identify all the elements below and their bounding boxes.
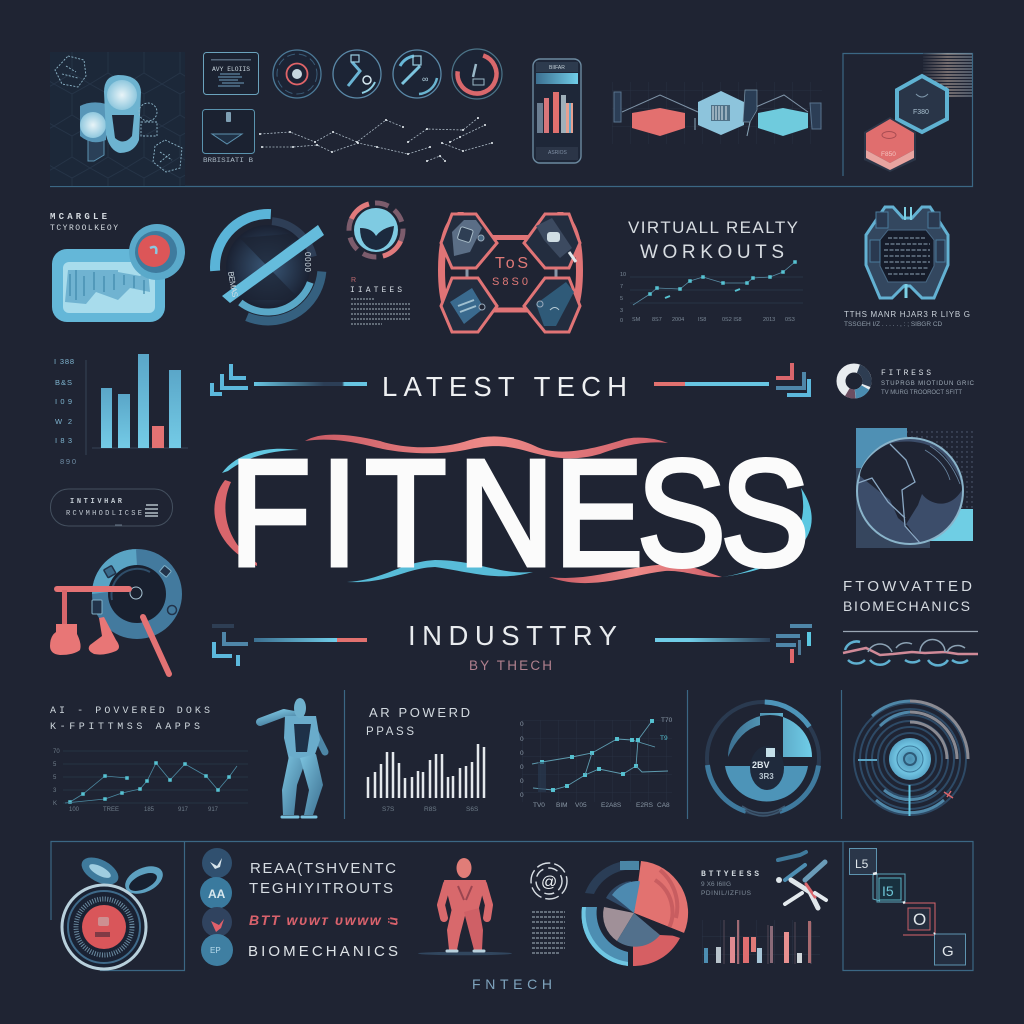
barcode tower bbox=[743, 90, 757, 122]
text: realtime techniques list: REAA(TSHVENTC bbox=[250, 860, 396, 877]
chart: three line chart: V05 bbox=[575, 802, 587, 809]
panel: smartwatches bbox=[50, 52, 185, 186]
text: features note bbox=[350, 277, 411, 324]
icon: earbuds and ring bbox=[62, 852, 167, 969]
connecting lines bbox=[622, 95, 808, 112]
card: funnel: BRBISIATI B bbox=[203, 157, 253, 164]
chart: AI line: 3 bbox=[53, 788, 57, 794]
chart: AI line: K bbox=[53, 801, 57, 807]
heading: biomechanics right: BIOMECHANICS bbox=[843, 598, 970, 614]
chart: VR line: SM bbox=[632, 317, 641, 323]
chart: pie bbox=[581, 860, 688, 966]
icon: shield processor bbox=[866, 207, 948, 298]
heading: AI powered: K-FPITTMSS AAPPS bbox=[50, 722, 200, 733]
heading: virtual reality workouts bbox=[628, 218, 798, 263]
hex: red: F850 bbox=[881, 151, 896, 158]
chart: blue bars bbox=[54, 354, 188, 466]
chart: big dial: 0000 bbox=[303, 252, 312, 273]
step 1: L5 bbox=[855, 857, 869, 871]
chart: blue bars: W2 bbox=[55, 417, 72, 426]
icon: at-sign fingerprint: @ bbox=[541, 874, 557, 891]
chart: blue bars: I83 bbox=[55, 436, 72, 445]
heading: AR powerd bbox=[366, 705, 470, 738]
chart: three line chart: BIM bbox=[556, 802, 568, 809]
device: top right bbox=[524, 214, 580, 268]
chart: concentric target bbox=[854, 701, 968, 816]
side brackets bbox=[614, 92, 621, 122]
chart: three line chart: T70 bbox=[661, 717, 673, 724]
pill: technologies: RCVMHODLICSE bbox=[66, 510, 142, 518]
chart: VR line: 8S7 bbox=[652, 317, 662, 323]
heading: AR powerd: AR POWERD bbox=[369, 705, 470, 720]
chart: constellation lines bbox=[260, 118, 492, 161]
card: funnel bbox=[202, 110, 254, 164]
chart: three line chart: E2A8S bbox=[601, 802, 622, 809]
sector: inner pie bbox=[606, 881, 634, 913]
label: hex centre: S8S0 bbox=[492, 276, 528, 288]
device: bottom right bbox=[524, 278, 580, 332]
heading: AI powered: AI - POVVERED DOKS bbox=[50, 706, 210, 717]
chart: VR line: 7 bbox=[620, 284, 623, 290]
sector: blue left ring bbox=[581, 907, 628, 966]
chart: AI line: TREE bbox=[103, 807, 119, 813]
device: top left bbox=[441, 214, 497, 268]
diagram: hexagonal device frame bbox=[438, 212, 583, 332]
chart: radial dial bbox=[692, 687, 834, 829]
chart: radial dial: 3R3 bbox=[759, 772, 774, 781]
text: realtime techniques list: TEGHIYITROUTS bbox=[249, 880, 393, 897]
sector: red main bbox=[634, 861, 688, 933]
subtitle: industry: INDUSTTRY bbox=[408, 620, 617, 651]
text: fntech footer: FNTECH bbox=[472, 976, 552, 992]
chart: blue bars: I 388 bbox=[54, 357, 74, 366]
chart: three line chart: E2RS bbox=[636, 802, 654, 809]
decoration: lower left bracket and rule bbox=[212, 624, 367, 666]
chart: big dial: BEMAS bbox=[226, 271, 239, 298]
text: fitness note: FITRESS bbox=[881, 369, 931, 378]
text: shield caption: TTHS MANR HJAR3 R LIYB G bbox=[844, 310, 970, 319]
icon: exercise figure bbox=[776, 852, 826, 908]
decoration: upper right bracket and rule bbox=[654, 363, 811, 397]
chart: white bars bbox=[368, 744, 484, 813]
chart: white bars: R8S bbox=[424, 806, 437, 813]
pill: technologies bbox=[50, 489, 172, 526]
icon: small donut bbox=[836, 363, 872, 399]
panel: hexagons top right bbox=[864, 54, 972, 172]
chart: three line chart: 0 bbox=[520, 736, 524, 743]
icon: watch back bbox=[80, 102, 106, 161]
links bbox=[490, 238, 531, 310]
step 2: I5 bbox=[882, 883, 894, 899]
heading: wearable technology bbox=[50, 212, 118, 233]
gauge 4 bbox=[452, 49, 502, 99]
chart: radial dial: 2BV bbox=[752, 760, 770, 770]
chart: AI line bbox=[53, 749, 248, 813]
title: FITNESS bbox=[230, 429, 809, 598]
text: small paragraph bbox=[532, 912, 565, 953]
hex: cyan bbox=[758, 108, 808, 136]
chart: pink bar grid bbox=[702, 920, 820, 964]
chart: three line chart: 0 bbox=[520, 778, 524, 785]
hex: blue: F380 bbox=[913, 109, 929, 116]
chart: three line chart: CA8 bbox=[657, 802, 670, 809]
stripes bbox=[923, 54, 972, 96]
gauge 2 bbox=[333, 50, 381, 98]
chart: white bars: S7S bbox=[382, 806, 395, 813]
card: top text bbox=[204, 52, 258, 94]
icon: chip badge bbox=[340, 194, 412, 266]
chart: VR line: 5 bbox=[620, 296, 623, 302]
step 3: O bbox=[913, 910, 926, 929]
chart: VR line: 0 bbox=[620, 318, 623, 324]
icon stack: round badges: AA bbox=[208, 887, 226, 901]
heading: wearable technology: TCYROOLKEOY bbox=[50, 224, 118, 233]
flow: stepped number squares bbox=[850, 848, 966, 965]
icon: hex badges bbox=[55, 56, 182, 172]
chart: VR line: 0S2 IS8 bbox=[722, 317, 742, 323]
chart: three line chart: T9 bbox=[660, 735, 668, 742]
icon: globe map bbox=[856, 428, 973, 548]
chart: AI line: 5 bbox=[53, 762, 57, 768]
heading: virtual reality workouts: VIRTUALL REALTY bbox=[628, 218, 798, 237]
text: features note: R bbox=[351, 277, 356, 284]
chart: AI line: 70 bbox=[53, 749, 60, 755]
chart: three line chart: 0 bbox=[520, 764, 524, 771]
outer crescents bbox=[438, 212, 464, 332]
decoration: upper left bracket and rule bbox=[210, 364, 367, 396]
chart: AI line: 185 bbox=[144, 807, 155, 813]
icon: wearable device bbox=[52, 224, 185, 322]
heading: biomechanics right bbox=[843, 578, 972, 614]
text: fitness stats note: PDINIL/IZFIUS bbox=[701, 890, 752, 897]
chart: blue bars: I09 bbox=[55, 397, 72, 406]
hex: red bbox=[632, 108, 685, 136]
chart: VR line: 2013 bbox=[763, 317, 775, 323]
gauge 1 bbox=[273, 50, 321, 98]
hex: blue bbox=[698, 91, 744, 135]
gauge 3 bbox=[393, 50, 441, 98]
chart: AI line: 5 bbox=[53, 775, 57, 781]
sector: red lower bbox=[633, 930, 680, 966]
label: hex centre: ToS bbox=[495, 255, 528, 272]
text: fitness stats note: 9 X6 I6IIG bbox=[701, 881, 731, 888]
heading: biomechanics right: FTOWVATTED bbox=[843, 578, 972, 595]
icon: watch front bbox=[104, 75, 141, 153]
chart: three line chart bbox=[520, 717, 673, 809]
icon stack: round badges: EP bbox=[210, 946, 221, 955]
text: fitness note: STUPRGB MIOTIDUN GRIC bbox=[881, 381, 975, 387]
heading: wearable technology: MCARGLE bbox=[50, 212, 108, 222]
text: fitness note: TV MURG TROOROCT SFITT bbox=[881, 390, 962, 396]
text: realtime techniques list: BIOMECHANICS bbox=[248, 943, 398, 960]
chart: AI line: 100 bbox=[69, 807, 80, 813]
subtitle: by thech: BY THECH bbox=[469, 658, 552, 673]
text: fitness stats note bbox=[701, 870, 759, 897]
chart: white bars: S6S bbox=[466, 806, 479, 813]
chart: VR line: 3 bbox=[620, 308, 623, 314]
icon stack: round badges bbox=[200, 848, 233, 966]
icon: phone with bars bbox=[533, 59, 581, 163]
chart: VR line bbox=[620, 262, 803, 324]
chart: VR line: 10 bbox=[620, 272, 626, 278]
icon row: four round gauges bbox=[273, 49, 502, 99]
heading: AI powered bbox=[50, 706, 210, 733]
text: shield caption bbox=[844, 310, 970, 328]
step 4: G bbox=[942, 943, 954, 960]
figure: blue athlete bbox=[260, 698, 325, 817]
icon: at-sign fingerprint bbox=[531, 863, 567, 899]
chart: VR line: IS8 bbox=[698, 317, 706, 323]
figure: red athlete bbox=[418, 858, 512, 955]
decoration: lower right bracket and rule bbox=[655, 624, 812, 663]
chart: three line chart: 0 bbox=[520, 750, 524, 757]
text: shield caption: TSSGEH I/Z . . . . . , : ; SIBGR CD bbox=[844, 321, 943, 328]
pill: technologies: INTIVHAR bbox=[70, 498, 123, 506]
chart: three line chart: TV0 bbox=[533, 802, 545, 809]
chart: VR line: 0S3 bbox=[785, 317, 795, 323]
icon: chain of rings bbox=[843, 632, 978, 665]
chart: blue bars: 890 bbox=[60, 457, 76, 466]
chart: big dial bbox=[209, 208, 327, 326]
icon: phone with bars: ASRIOS bbox=[548, 150, 568, 156]
ribbons around title bbox=[214, 435, 812, 583]
text: fitness stats note: BTTYEESS bbox=[701, 870, 759, 879]
heading: AR powerd: PPASS bbox=[366, 726, 414, 738]
gauge 3: ∞ bbox=[422, 74, 428, 84]
card: top text: AVY ELOIIS bbox=[212, 66, 250, 73]
device: bottom left bbox=[441, 278, 497, 332]
chart: AI line: 917 bbox=[178, 807, 189, 813]
chart: three line chart: 0 bbox=[520, 721, 524, 728]
chart: VR line: 2004 bbox=[672, 317, 684, 323]
subtitle: latest tech: LATEST TECH bbox=[382, 371, 627, 402]
icon: gym machine dial bbox=[50, 549, 182, 674]
panel: hexagon band bbox=[612, 82, 822, 144]
text: features note: IIATEES bbox=[350, 286, 402, 295]
heading: virtual reality workouts: WORKOUTS bbox=[640, 242, 784, 263]
text: realtime techniques list bbox=[248, 860, 398, 960]
chart: AI line: 917 bbox=[208, 807, 219, 813]
chart: three line chart: 0 bbox=[520, 792, 524, 799]
icon: phone with bars: BIIFAR bbox=[549, 65, 565, 71]
text: realtime techniques list: BTT ᴡᴜᴡᴛ ᴜᴡᴡᴡ ᴞ bbox=[249, 912, 398, 928]
machine arms and feet bbox=[50, 586, 169, 674]
label: hex centre bbox=[492, 255, 528, 288]
text: fitness note bbox=[881, 369, 975, 396]
chart: blue bars: B&S bbox=[55, 378, 72, 387]
